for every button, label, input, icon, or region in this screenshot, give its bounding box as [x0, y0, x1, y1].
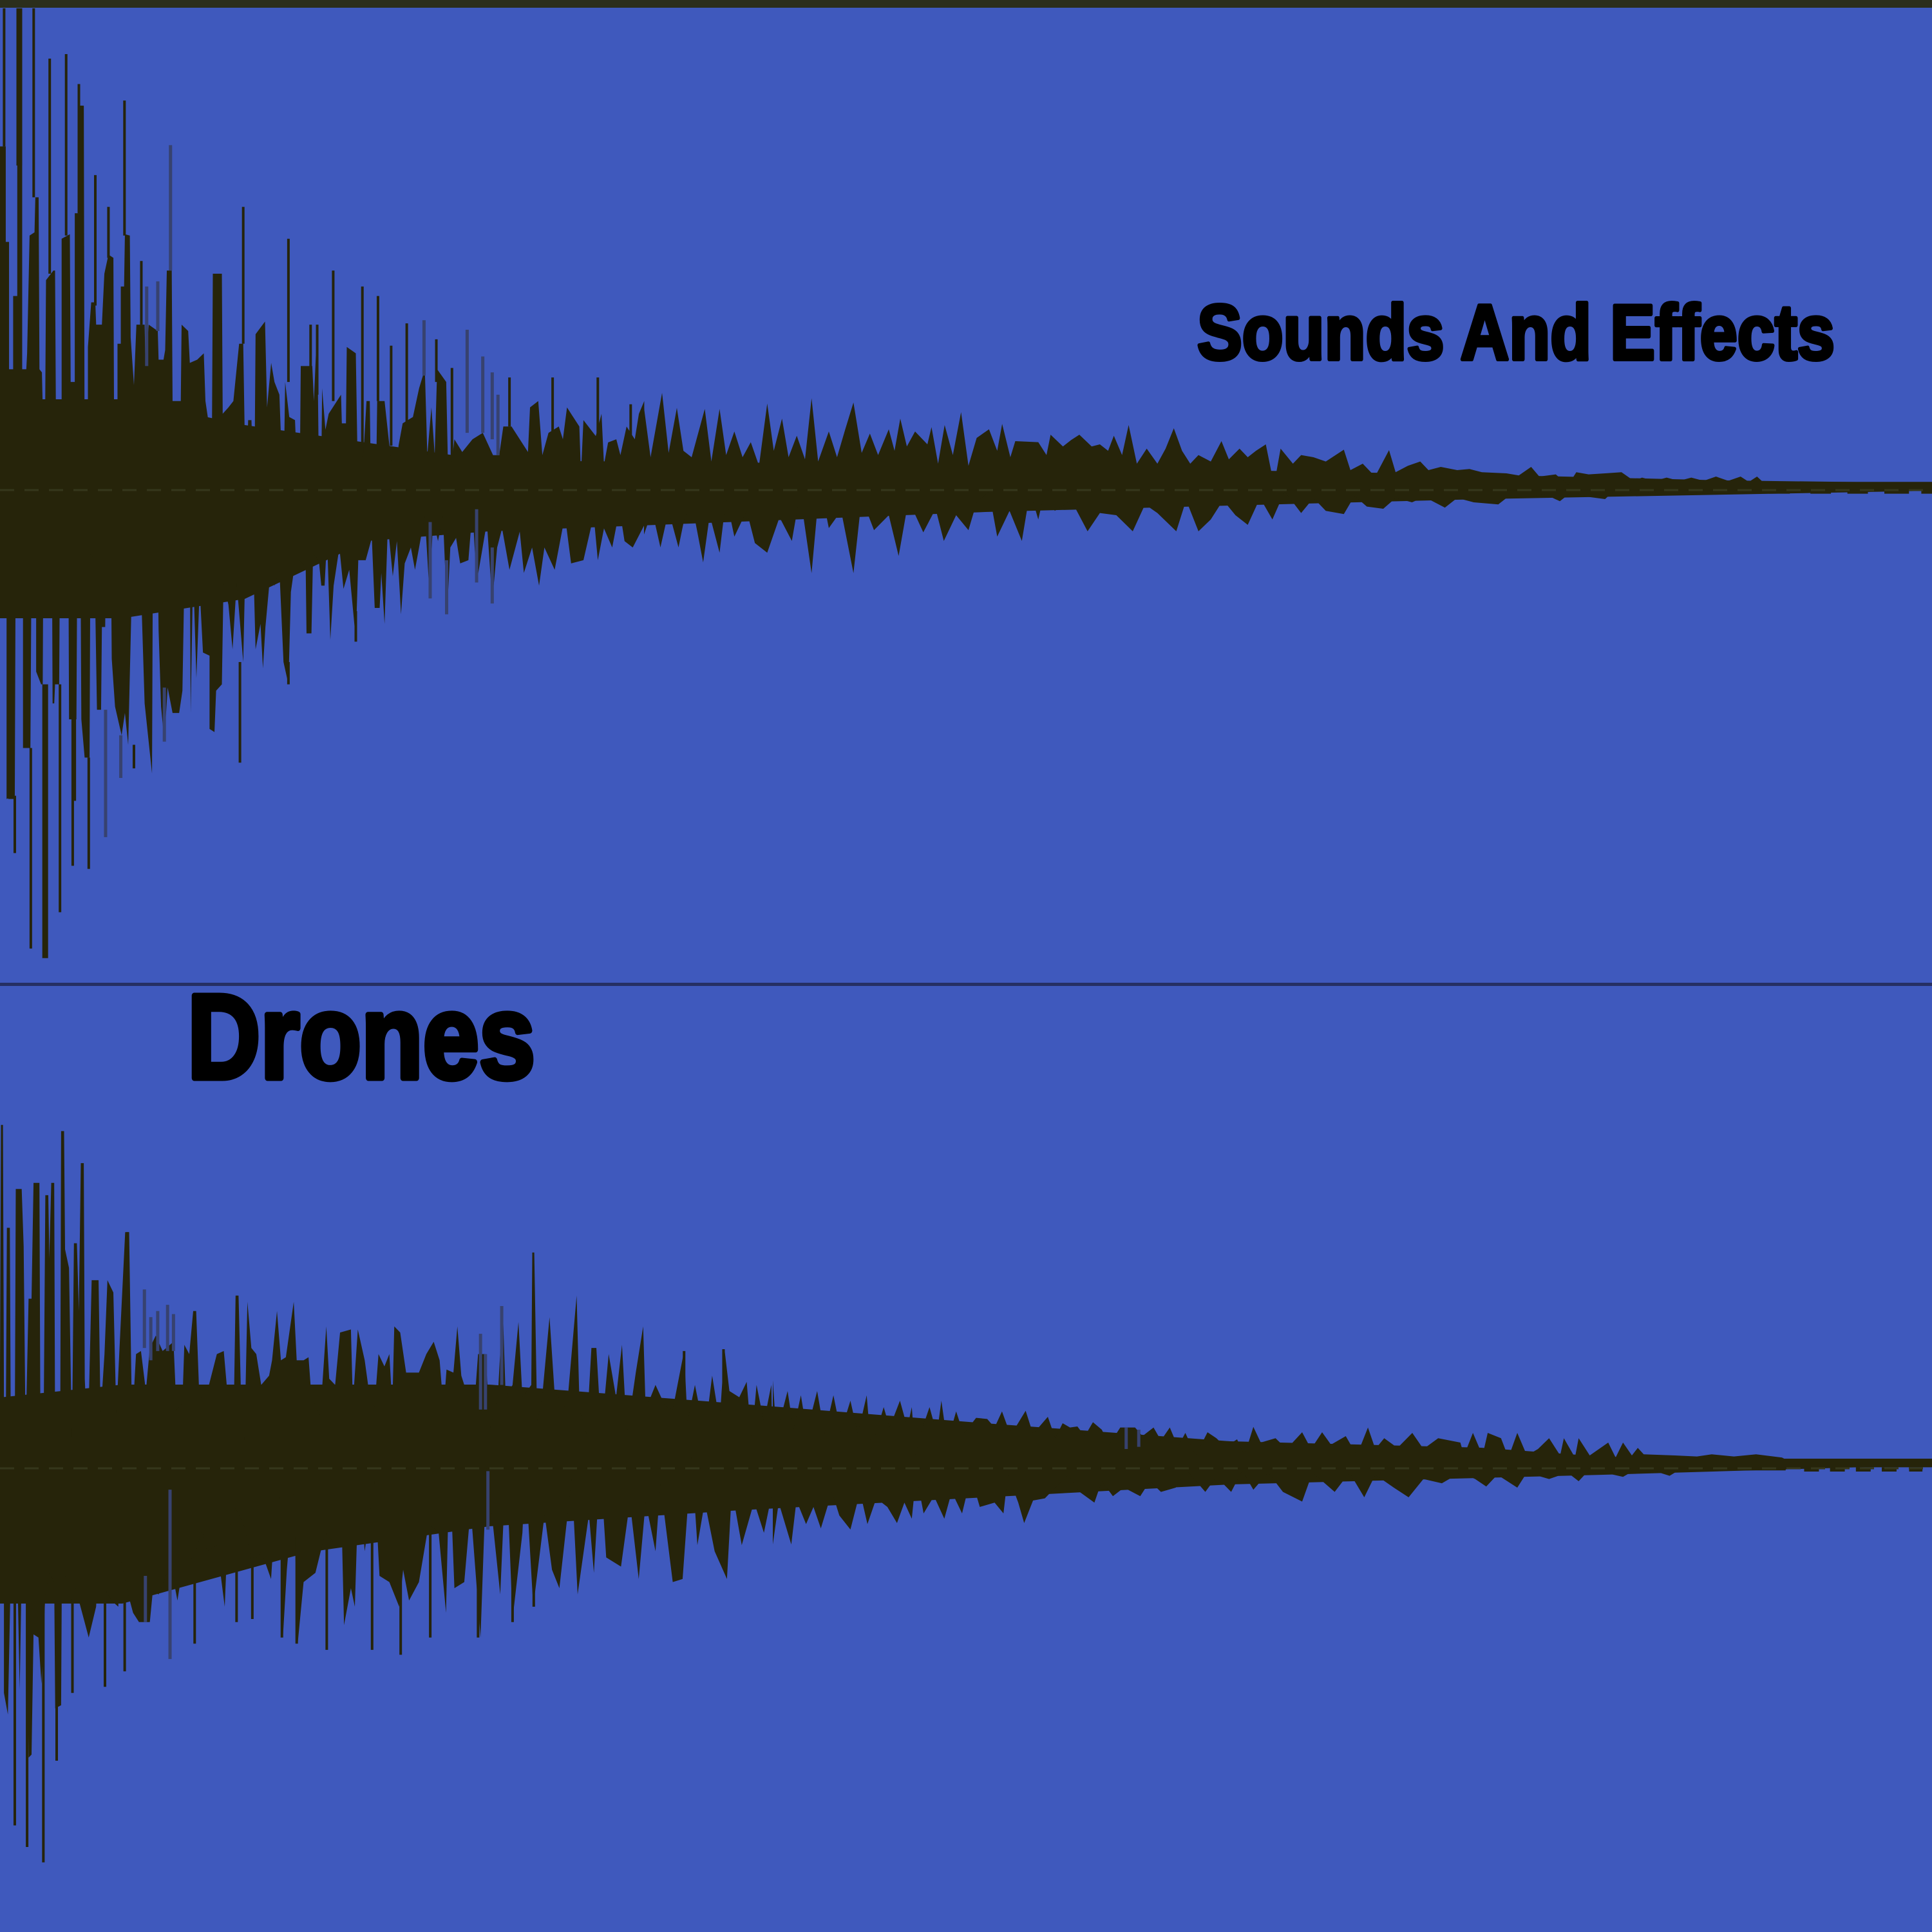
heading: Drones: Drones — [187, 971, 535, 1104]
top edge bar — [0, 0, 1932, 8]
panel: upper waveform — [0, 8, 1932, 958]
panel: lower waveform — [0, 1125, 1932, 1862]
divider between panels — [0, 983, 1932, 986]
heading: Sounds And Effects: Sounds And Effects — [1197, 289, 1835, 376]
